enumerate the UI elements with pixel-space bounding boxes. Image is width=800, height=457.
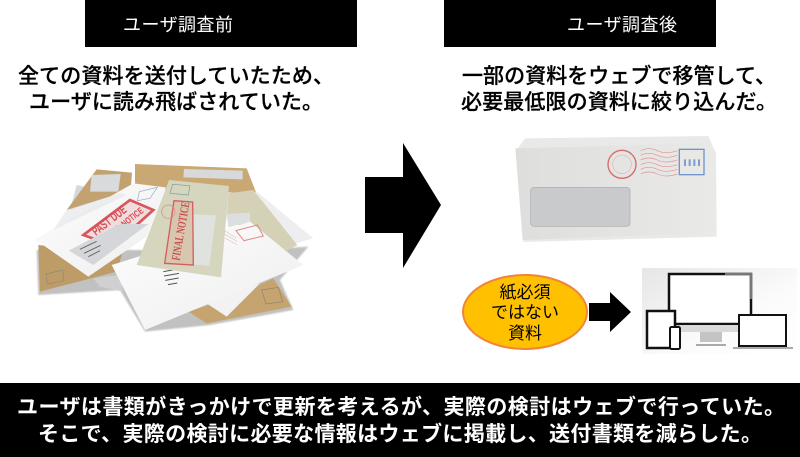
left white envelope xyxy=(35,183,166,277)
arrow: main xyxy=(365,143,441,268)
back envelopes xyxy=(70,185,120,210)
beige centre envelope xyxy=(137,180,229,277)
callout: not paper-required documents xyxy=(463,275,587,349)
arrow: small xyxy=(589,292,631,332)
image: pile of envelopes: PAST DUE xyxy=(89,203,129,238)
image: reduced envelope xyxy=(515,136,717,242)
laptop xyxy=(739,315,786,346)
text: before description: ユーザに読み飛ばされていた。 xyxy=(29,91,323,114)
callout: not paper-required documents: ではない xyxy=(491,303,559,322)
image: pile of envelopes xyxy=(35,164,313,332)
callout: not paper-required documents: 紙必須 xyxy=(500,283,550,302)
header: after: ユーザ調査後 xyxy=(567,15,677,35)
summary bar: そこで、実際の検討に必要な情報はウェブに掲載し、送付書類を減らした。 xyxy=(38,422,762,446)
monitor xyxy=(669,274,751,324)
image: pile of envelopes: FINAL NOTICE xyxy=(102,206,145,242)
header: before: ユーザ調査前 xyxy=(123,15,233,35)
callout: not paper-required documents: 資料 xyxy=(508,324,542,343)
text: before description xyxy=(18,65,334,114)
phone xyxy=(670,327,680,349)
image: web devices xyxy=(642,268,797,354)
text: after description: 必要最低限の資料に絞り込んだ。 xyxy=(461,91,777,114)
header: before xyxy=(85,0,357,47)
text: before description: 全ての資料を送付していたため、 xyxy=(18,65,334,88)
summary bar: ユーザは書類がきっかけで更新を考えるが、実際の検討はウェブで行っていた。 xyxy=(17,395,785,419)
tablet xyxy=(647,311,675,348)
big white envelope xyxy=(112,222,303,330)
header: after xyxy=(444,0,716,47)
summary bar xyxy=(0,383,800,457)
text: after description: 一部の資料をウェブで移管して、 xyxy=(462,64,776,88)
image: pile of envelopes: FINAL NOTICE xyxy=(168,201,193,262)
text: after description xyxy=(461,64,777,114)
